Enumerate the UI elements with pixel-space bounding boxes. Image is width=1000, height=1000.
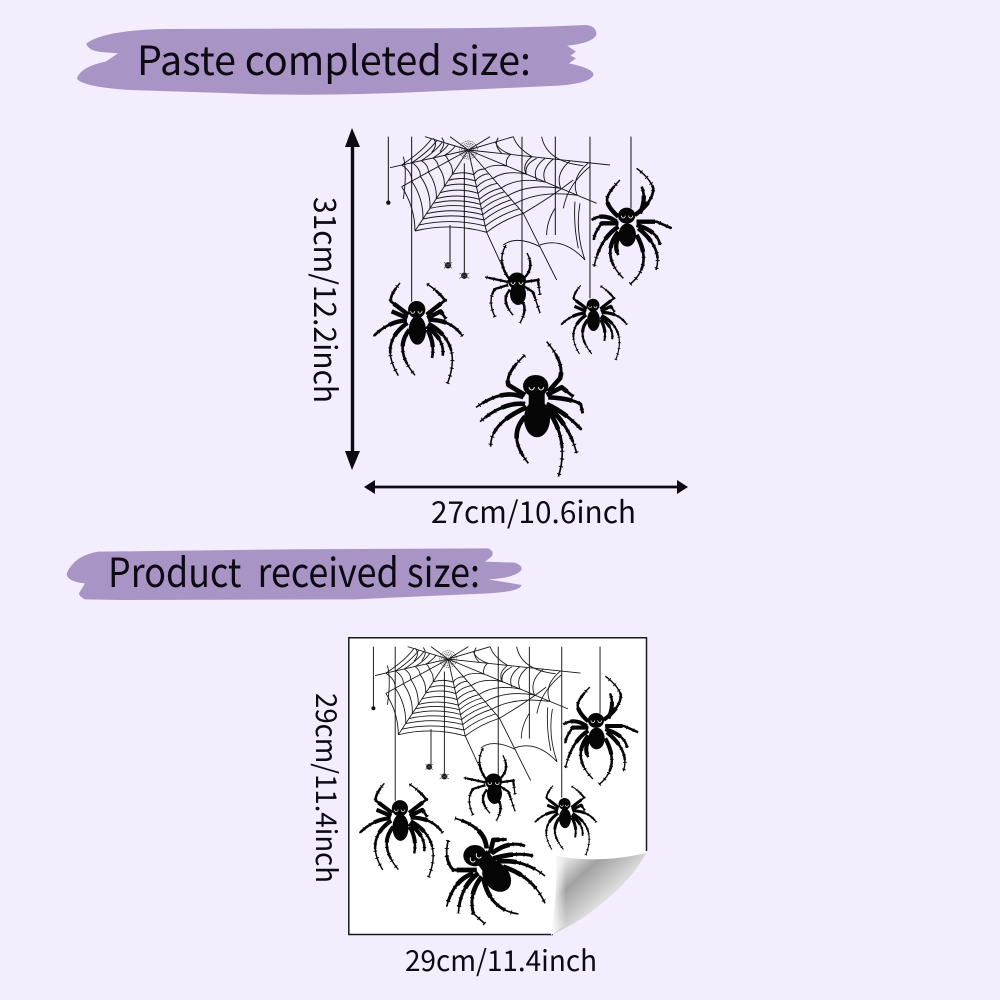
label: sheet height: 29cm/11.4inch xyxy=(307,693,349,883)
sheet border xyxy=(349,638,646,934)
arrow: width dimension xyxy=(364,480,688,494)
brush stroke banner top xyxy=(77,25,596,95)
sheet background xyxy=(349,638,646,934)
heading text top: Paste completed size: xyxy=(137,29,531,87)
heading: paste completed size xyxy=(77,25,596,95)
brush stroke banner bottom xyxy=(67,548,522,600)
label: sheet width: 29cm/11.4inch xyxy=(405,938,597,980)
heading: product received size xyxy=(67,541,522,600)
artwork: assembled spider web decal xyxy=(373,137,672,384)
arrow: height dimension xyxy=(345,128,360,470)
large spider xyxy=(476,342,583,477)
fallen large spider xyxy=(447,818,545,924)
sticker sheet xyxy=(349,638,646,935)
artwork: sticker preview xyxy=(359,647,638,877)
heading text bottom: Product received size: xyxy=(108,541,480,599)
label: height: 31cm/12.2inch xyxy=(305,197,350,403)
label: width: 27cm/10.6inch xyxy=(431,488,636,532)
peeled corner xyxy=(551,853,646,935)
